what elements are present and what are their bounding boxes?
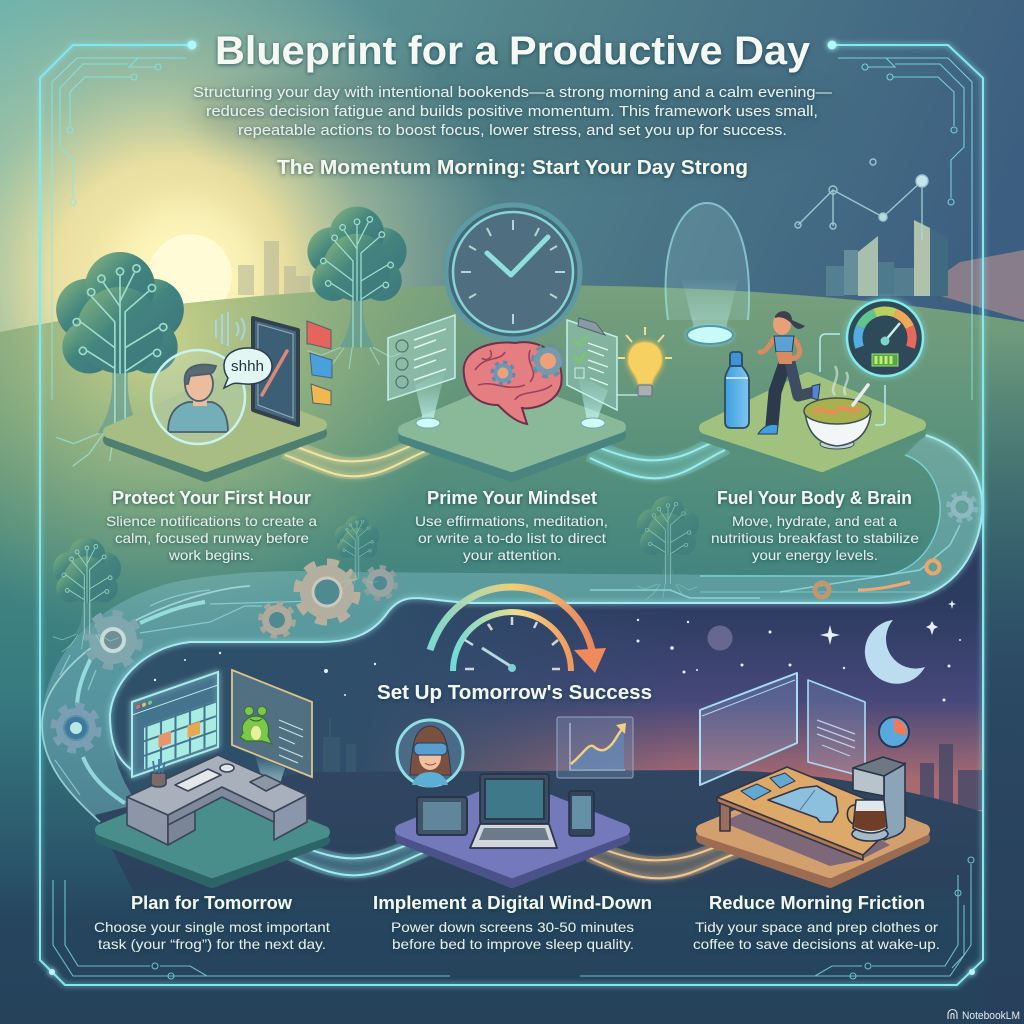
hologram browser windows (700, 673, 865, 785)
rising chart panel (557, 717, 633, 778)
text: protect your first hour: work begins. (168, 547, 254, 563)
text: plan for tomorrow: Choose your single most important (94, 919, 330, 935)
text: fuel your body and brain (711, 488, 919, 563)
glass bubble (151, 350, 245, 444)
text: reduce morning friction: Reduce Morning Friction (709, 893, 925, 913)
gauge connector lines (820, 334, 885, 425)
road band lines (42, 435, 982, 822)
panel: focus bubble with person (151, 350, 245, 444)
section heading: morning: The Momentum Morning: Start Your Day Strong (277, 157, 748, 179)
bottom-left circuit (53, 880, 450, 979)
network graph in sky (795, 159, 928, 240)
gear: large centre (298, 563, 356, 621)
intro text: reduces decision fatigue and builds positive momentum. This framework uses small, (206, 104, 818, 120)
rolling green hill and lower ground (0, 285, 1024, 1024)
gears along the road (54, 494, 975, 750)
top-right circuit (838, 58, 972, 400)
platform 6 (702, 785, 924, 882)
text: protect your first hour: Protect Your First Hour (112, 488, 311, 508)
connector: blue ribbon 2 (590, 436, 725, 478)
text: prime your mindset: Prime Your Mindset (427, 488, 597, 508)
text: digital wind-down: Implement a Digital Wind-Down (373, 893, 652, 913)
holographic dome (666, 203, 749, 344)
gear: right bend (949, 494, 975, 520)
icon: runner (758, 311, 820, 434)
icon: laptop (470, 774, 557, 848)
text: digital wind-down: before bed to improve sleep quality. (392, 936, 634, 952)
intro text: Structuring your day with intentional bookends—a strong morning and a calm evening— (193, 85, 833, 101)
section heading: evening: Set Up Tomorrow's Success (377, 682, 652, 704)
text: prime your mindset: Use effirmations, meditation, (415, 513, 608, 529)
icon: breakfast bowl (804, 366, 871, 449)
holographic frog panel (232, 670, 312, 790)
icon: table with clothes (717, 767, 905, 860)
intro text: repeatable actions to boost focus, lower stress, and set you up for success. (238, 123, 787, 139)
holographic calendar (132, 672, 218, 777)
icon: rising sun (118, 203, 262, 347)
watermark: NotebookLM: NotebookLM (962, 1010, 1020, 1022)
icon: sound waves (216, 312, 244, 346)
platform 5 (401, 785, 624, 882)
icon: energy gauge (847, 300, 923, 376)
text: prime your mindset (415, 488, 608, 563)
gear: road bend lower (54, 706, 98, 750)
wall clock (446, 205, 580, 339)
gear: small orange (926, 560, 940, 574)
connector: gold ribbon 4 (590, 838, 740, 878)
icon: VR avatar (397, 720, 463, 788)
platform 2 (404, 385, 620, 476)
left skyline (238, 241, 310, 296)
icon: faint moon (708, 626, 732, 650)
connector: cyan ribbon 3 (290, 838, 425, 875)
trees (53, 207, 699, 652)
text: protect your first hour: Slience notifications to create a (106, 513, 317, 529)
text: prime your mindset: or write a to-do list to direct (418, 530, 606, 546)
top-left circuit (52, 58, 186, 400)
speedometer with arrow (430, 587, 606, 673)
right night skyline (920, 744, 983, 810)
holographic clipboard (567, 318, 644, 428)
text: digital wind-down (373, 893, 652, 952)
icon: L-shaped desk (127, 755, 307, 845)
stars (154, 600, 961, 702)
road band fill (42, 435, 982, 822)
icon: notification badges (307, 321, 332, 405)
text: reduce morning friction: coffee to save decisions at wake-up. (693, 936, 940, 952)
connector: gold ribbon 1 (285, 438, 428, 476)
text: protect your first hour (106, 488, 317, 563)
night ground (95, 770, 983, 925)
gear: road bend top (87, 614, 139, 666)
platform 3 (705, 378, 920, 476)
text: reduce morning friction (693, 893, 940, 952)
icon: light bulb (618, 327, 672, 396)
text: protect your first hour: calm, focused runway before (115, 530, 309, 546)
speech bubble: shhh (224, 348, 272, 388)
right skyline (826, 220, 1024, 320)
bottom-right circuit (580, 857, 974, 979)
intro text (193, 85, 833, 139)
icon: clock pie (879, 717, 909, 747)
platform 4 (101, 785, 324, 882)
left night skyline (323, 718, 356, 777)
text: reduce morning friction: Tidy your space and prep clothes or (695, 919, 938, 935)
text: plan for tomorrow (94, 893, 330, 952)
soft shade behind intro (192, 57, 832, 173)
icon: tablet (417, 797, 467, 835)
gear: small left (261, 604, 293, 636)
text: digital wind-down: Power down screens 30-50 minutes (391, 919, 634, 935)
icon: brain with gears (464, 342, 562, 424)
platform 1 (109, 385, 321, 476)
text: fuel your body and brain: nutritious breakfast to stabilize (711, 530, 919, 546)
gear: small right (365, 568, 395, 598)
text: fuel your body and brain: your energy levels. (752, 547, 878, 563)
night sky (110, 515, 983, 820)
title: Blueprint for a Productive Day (215, 29, 811, 73)
background: dawn sky (0, 0, 1024, 620)
icon: person (168, 365, 228, 432)
icon: water bottle (725, 352, 749, 428)
gear: orange lower (815, 583, 829, 597)
icon: silenced phone (253, 318, 298, 425)
speech bubble: shhh: shhh (231, 359, 264, 375)
icon: frog (240, 706, 272, 744)
text: fuel your body and brain: Fuel Your Body & Brain (717, 488, 912, 508)
icon: smartphone (569, 791, 594, 836)
icon: coffee maker (847, 757, 905, 841)
text: fuel your body and brain: Move, hydrate, and eat a (732, 513, 897, 529)
text: plan for tomorrow: task (your “frog”) for the next day. (98, 936, 326, 952)
text: prime your mindset: your attention. (463, 547, 561, 563)
holographic checklist (388, 315, 455, 428)
icon: crescent moon (865, 620, 925, 684)
text: plan for tomorrow: Plan for Tomorrow (131, 893, 293, 913)
